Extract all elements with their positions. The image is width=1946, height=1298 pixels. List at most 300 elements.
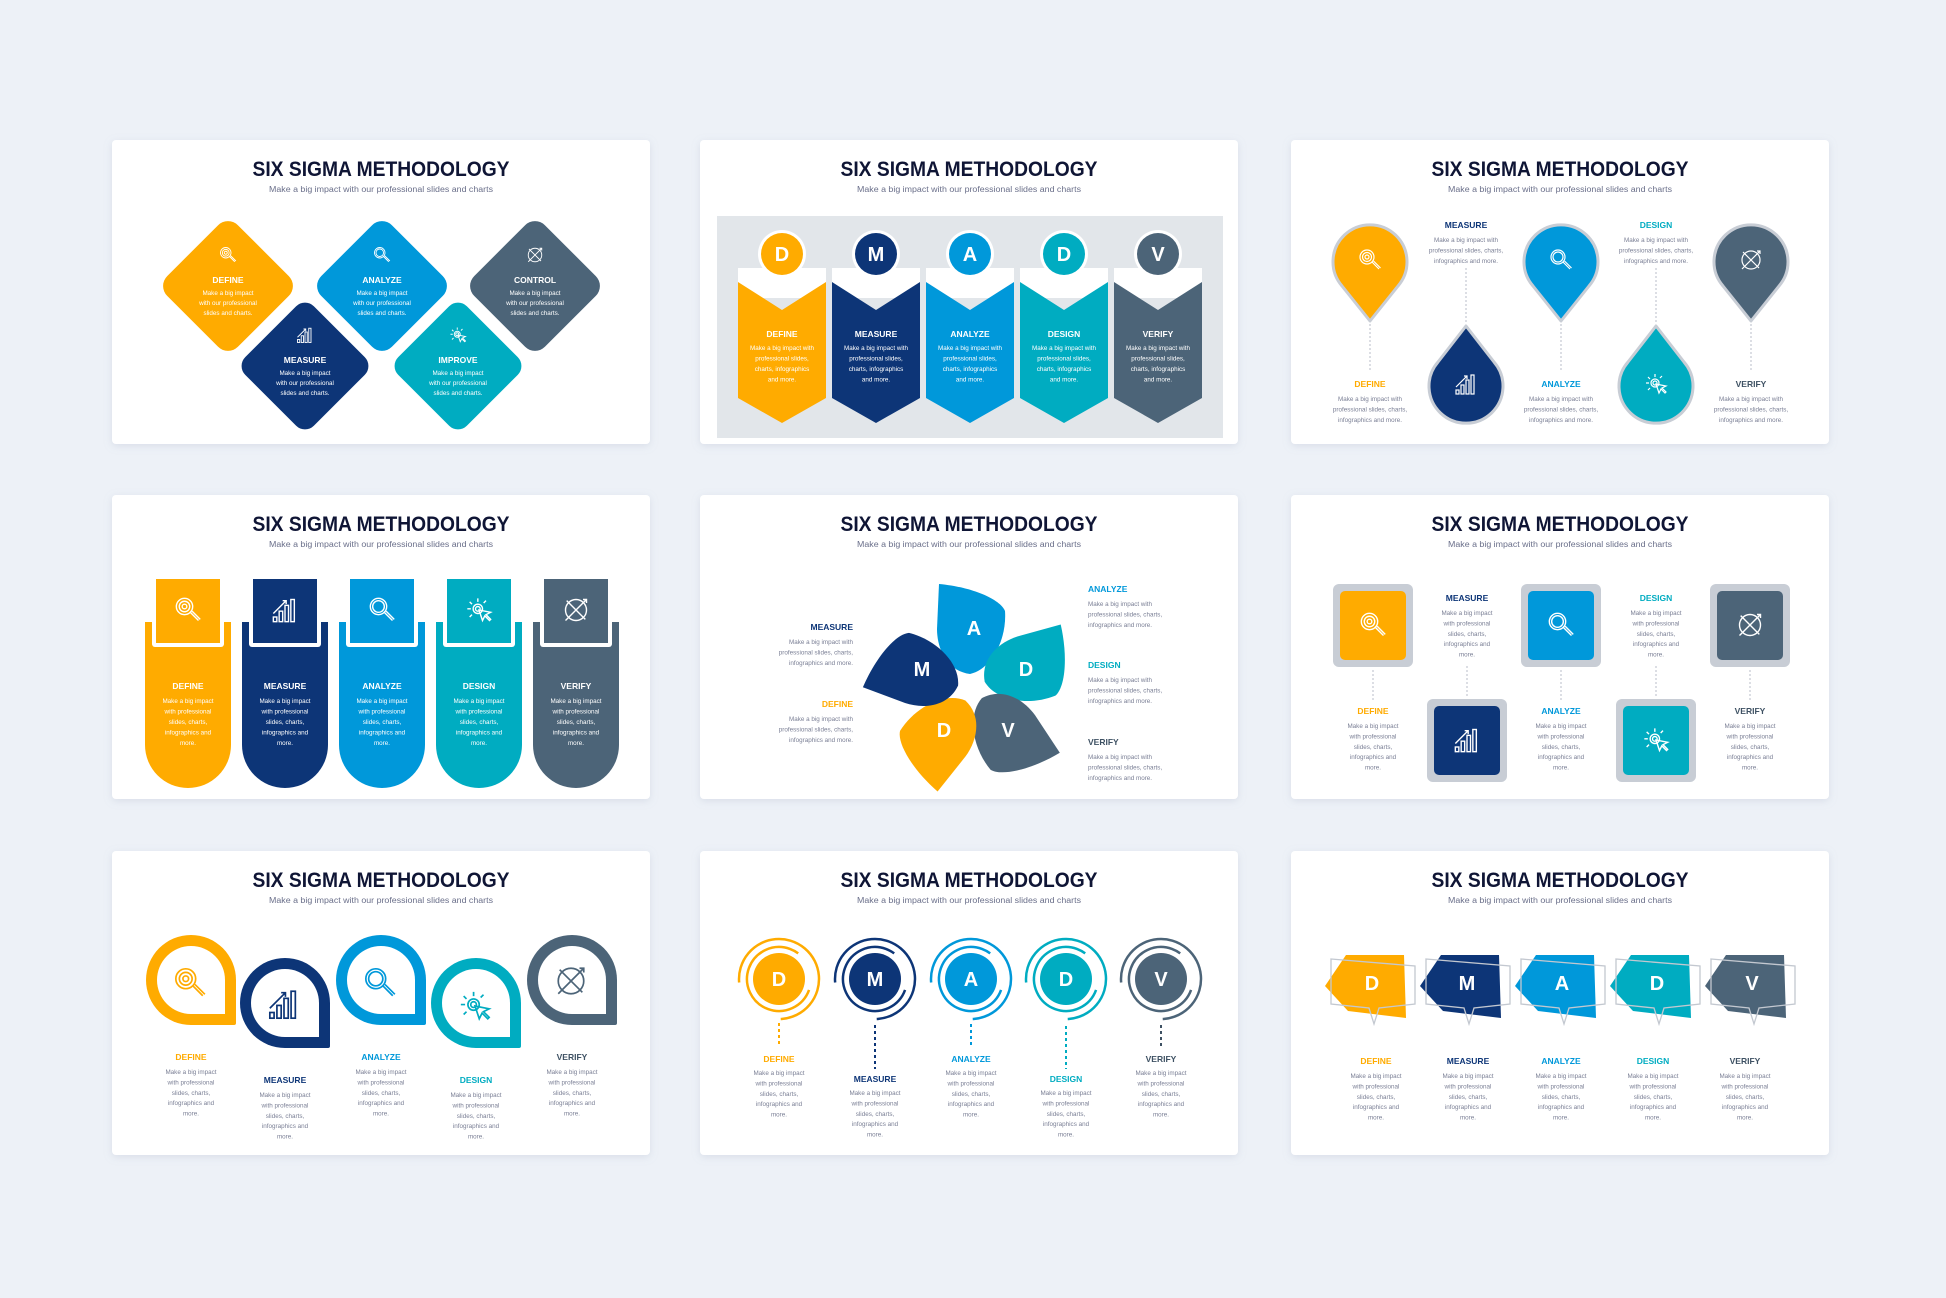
label: measure: infographics and more. (789, 660, 853, 667)
diamond: analyze: Make a big impact (356, 290, 408, 297)
tag: analyze: slides, charts, (1542, 1094, 1580, 1101)
flower chart: A (967, 618, 981, 640)
diamond: improve: Make a big impact (432, 370, 484, 377)
panel: chevron columns DMADV (700, 140, 1238, 444)
tab: measure: slides, charts, (266, 719, 304, 726)
pin: verify: VERIFY (1736, 379, 1767, 389)
circle: analyze: slides, charts, (952, 1091, 990, 1098)
diamond: define: with our professional (198, 300, 257, 307)
label: measure: professional slides, charts, (779, 649, 853, 656)
pin: verify: infographics and more. (1719, 417, 1783, 424)
tab: analyze: ANALYZE (362, 681, 402, 691)
pin: analyze (1524, 225, 1598, 424)
drop: verify: slides, charts, (553, 1090, 591, 1097)
tab: define: infographics and (165, 730, 212, 736)
circle: measure: MEASURE (854, 1074, 897, 1084)
title: SIX SIGMA METHODOLOGY (840, 869, 1098, 892)
title: Make a big impact with our professional slides and charts (857, 185, 1081, 194)
pin: analyze: infographics and more. (1529, 417, 1593, 424)
label: verify (1088, 737, 1162, 782)
tab: design: slides, charts, (460, 719, 498, 726)
tag: define: DEFINE (1360, 1056, 1392, 1066)
diamond: analyze: with our professional (352, 300, 411, 307)
circle: define (736, 936, 822, 1119)
drop: analyze: ANALYZE (361, 1052, 401, 1062)
gray backdrop (717, 216, 1223, 438)
circle: measure: infographics and (852, 1121, 899, 1128)
title (840, 158, 1098, 194)
diamond: analyze: slides and charts. (357, 310, 407, 317)
tab: verify (533, 575, 619, 788)
tab: verify: infographics and (553, 730, 600, 736)
circle: verify: Make a big impact (1135, 1070, 1187, 1077)
circle: define: DEFINE (763, 1054, 795, 1064)
tab: design (436, 575, 522, 788)
diamond: measure: MEASURE (284, 355, 327, 365)
title (1432, 158, 1688, 194)
title: Make a big impact with our professional slides and charts (269, 896, 493, 905)
label: analyze: Make a big impact with (1088, 601, 1153, 608)
tag: analyze: with professional (1537, 1083, 1584, 1090)
drop: analyze (336, 935, 426, 1118)
tab: verify: more. (568, 740, 584, 747)
tag: verify: more. (1737, 1115, 1753, 1122)
panel: tab columns (112, 495, 650, 799)
tag: measure: M (1459, 973, 1475, 995)
flower chart: M (914, 659, 930, 681)
tab: design: more. (471, 740, 487, 747)
square: measure (1427, 593, 1507, 782)
tag: verify: Make a big impact (1719, 1073, 1771, 1080)
diamond: improve: IMPROVE (438, 355, 478, 365)
drop: verify (527, 935, 617, 1118)
circle: define: infographics and (756, 1101, 803, 1108)
square: analyze: infographics and (1538, 754, 1585, 761)
square: analyze: slides, charts, (1542, 744, 1580, 751)
drop: define: infographics and (168, 1100, 215, 1107)
square: verify: VERIFY (1735, 706, 1766, 716)
square: define: DEFINE (1357, 706, 1389, 716)
square: measure: infographics and (1444, 641, 1491, 648)
tag: define (1325, 955, 1415, 1122)
pin: verify: Make a big impact with (1719, 396, 1784, 403)
pin: design: professional slides, charts, (1619, 247, 1693, 254)
column: verify: and more. (1144, 376, 1172, 384)
column: measure: M (868, 244, 884, 266)
diamond: define: DEFINE (212, 275, 244, 285)
circle: define: D (772, 969, 786, 991)
pin: define: professional slides, charts, (1333, 406, 1407, 413)
title: SIX SIGMA METHODOLOGY (252, 869, 510, 892)
tab: analyze: more. (374, 740, 390, 747)
pin: define (1333, 225, 1407, 424)
circle: design: slides, charts, (1047, 1111, 1085, 1118)
drop: verify: Make a big impact (546, 1069, 598, 1076)
pin: verify: professional slides, charts, (1714, 406, 1788, 413)
square: measure: MEASURE (1446, 593, 1489, 603)
tab: analyze: infographics and (359, 730, 406, 736)
drop: define: with professional (167, 1079, 214, 1086)
label: analyze: professional slides, charts, (1088, 611, 1162, 618)
tag: analyze: ANALYZE (1541, 1056, 1581, 1066)
pin: measure: MEASURE (1445, 220, 1488, 230)
pin: analyze: professional slides, charts, (1524, 406, 1598, 413)
tab: verify: Make a big impact (550, 698, 602, 705)
title: SIX SIGMA METHODOLOGY (1432, 869, 1688, 892)
square: design (1616, 593, 1696, 782)
diamond: control: Make a big impact (509, 290, 561, 297)
title: SIX SIGMA METHODOLOGY (840, 158, 1098, 181)
drop: define (146, 935, 236, 1118)
drop: measure: MEASURE (264, 1075, 307, 1085)
diamond: define: slides and charts. (203, 310, 253, 317)
label: define: DEFINE (822, 699, 853, 709)
tag: define: more. (1368, 1115, 1384, 1122)
diamond: measure: with our professional (275, 380, 334, 387)
square: verify: with professional (1726, 733, 1773, 740)
drop: measure: Make a big impact (259, 1092, 311, 1099)
label: define: professional slides, charts, (779, 726, 853, 733)
label: design: Make a big impact with (1088, 677, 1153, 684)
tag: analyze (1515, 955, 1605, 1122)
column: analyze: ANALYZE (950, 329, 990, 339)
column: verify: V (1151, 244, 1165, 266)
column: define: DEFINE (766, 329, 798, 339)
label: design: infographics and more. (1088, 698, 1152, 705)
title: Make a big impact with our professional slides and charts (1448, 896, 1672, 905)
diamond: improve (387, 295, 529, 437)
drop: measure: more. (277, 1134, 293, 1141)
square: design: infographics and (1633, 641, 1680, 648)
flower chart (862, 584, 1081, 793)
label: design (1088, 660, 1162, 705)
drop: define: slides, charts, (172, 1090, 210, 1097)
column: define: D (775, 244, 789, 266)
circle: analyze (928, 936, 1014, 1119)
circle: analyze: Make a big impact (945, 1070, 997, 1077)
square: design: with professional (1632, 620, 1679, 627)
diamond: control: CONTROL (514, 275, 556, 285)
circle: design: infographics and (1043, 1121, 1090, 1128)
square: measure: Make a big impact (1441, 610, 1493, 617)
column: analyze: A (963, 244, 977, 266)
tag: measure: more. (1460, 1115, 1476, 1122)
circle: design: Make a big impact (1040, 1090, 1092, 1097)
column: define: professional slides, (755, 356, 809, 362)
pin: measure: infographics and more. (1434, 258, 1498, 265)
diamond: measure: Make a big impact (279, 370, 331, 377)
square: verify: infographics and (1727, 754, 1774, 761)
title: SIX SIGMA METHODOLOGY (1432, 513, 1688, 536)
drop: design: Make a big impact (450, 1092, 502, 1099)
diamond: control: slides and charts. (510, 310, 560, 317)
circle: analyze: more. (963, 1112, 979, 1119)
pin: measure: Make a big impact with (1434, 237, 1499, 244)
tag: analyze: infographics and (1538, 1104, 1585, 1111)
square: measure: more. (1459, 652, 1475, 659)
tab: define: DEFINE (172, 681, 204, 691)
drop: design: DESIGN (460, 1075, 492, 1085)
label: measure: Make a big impact with (789, 639, 853, 646)
tab: measure: more. (277, 740, 293, 747)
tab: analyze: with professional (358, 708, 405, 716)
circle: define: slides, charts, (760, 1091, 798, 1098)
tag: measure: infographics and (1445, 1104, 1492, 1111)
diamond: control (464, 215, 606, 357)
circle: define: with professional (755, 1080, 802, 1087)
circle: measure: M (867, 969, 883, 991)
square: define (1333, 584, 1413, 772)
diamond: measure (234, 295, 376, 437)
pin: design: infographics and more. (1624, 258, 1688, 265)
tab: analyze: Make a big impact (356, 698, 408, 705)
column: design: and more. (1050, 376, 1078, 384)
column: design: professional slides, (1037, 356, 1091, 362)
column: measure: professional slides, (849, 356, 903, 362)
label: verify: VERIFY (1088, 737, 1119, 747)
tag: verify: with professional (1721, 1083, 1768, 1090)
circle: verify: V (1154, 969, 1168, 991)
column: design: D (1057, 244, 1071, 266)
circle: analyze: A (964, 969, 978, 991)
tab: define: Make a big impact (162, 698, 214, 705)
column: verify (1114, 230, 1202, 423)
circle: analyze: ANALYZE (951, 1054, 991, 1064)
drop: verify: infographics and (549, 1100, 596, 1107)
drop: define: DEFINE (175, 1052, 207, 1062)
pin: define: infographics and more. (1338, 417, 1402, 424)
label: analyze: infographics and more. (1088, 622, 1152, 629)
column: analyze (926, 230, 1014, 423)
panel: ring drops (112, 851, 650, 1155)
label: verify: infographics and more. (1088, 775, 1152, 782)
drop: design (431, 958, 521, 1141)
diamond: improve: with our professional (428, 380, 487, 387)
diamond: define: Make a big impact (202, 290, 254, 297)
tag: verify: V (1745, 973, 1759, 995)
column: measure: Make a big impact with (844, 345, 909, 352)
circle: measure: with professional (851, 1100, 898, 1107)
flower chart: D (937, 720, 951, 742)
column: analyze: and more. (956, 376, 984, 384)
column: verify: charts, infographics (1131, 366, 1185, 373)
label: verify: professional slides, charts, (1088, 764, 1162, 771)
square: verify: more. (1742, 765, 1758, 772)
square: define: with professional (1349, 733, 1396, 740)
tag: measure: Make a big impact (1442, 1073, 1494, 1080)
label: define (779, 699, 853, 744)
drop: define: more. (183, 1111, 199, 1118)
drop: define: Make a big impact (165, 1069, 217, 1076)
tab: define (145, 575, 231, 788)
column: define (738, 230, 826, 423)
square: define: infographics and (1350, 754, 1397, 761)
column: define: Make a big impact with (750, 345, 815, 352)
circle: define: Make a big impact (753, 1070, 805, 1077)
tag: define: with professional (1352, 1083, 1399, 1090)
square: verify: slides, charts, (1731, 744, 1769, 751)
column: define: and more. (768, 376, 796, 384)
circle: design: D (1059, 969, 1073, 991)
circle: analyze: with professional (947, 1080, 994, 1087)
panel: tag shapes (1291, 851, 1829, 1155)
tab: design: with professional (455, 708, 502, 716)
drop: analyze: more. (373, 1111, 389, 1118)
pin: design (1619, 220, 1693, 423)
square: verify: Make a big impact (1724, 723, 1776, 730)
pin: analyze: ANALYZE (1541, 379, 1581, 389)
tag: measure (1420, 955, 1510, 1122)
pin: design: DESIGN (1640, 220, 1672, 230)
label: measure (779, 622, 853, 667)
tag: design (1610, 955, 1700, 1122)
tag: design: D (1650, 973, 1664, 995)
square: analyze: ANALYZE (1541, 706, 1581, 716)
title (1432, 513, 1688, 549)
drop: verify: with professional (548, 1079, 595, 1086)
circle: analyze: infographics and (948, 1101, 995, 1108)
square: analyze: more. (1553, 765, 1569, 772)
drop: analyze: Make a big impact (355, 1069, 407, 1076)
tag: analyze: more. (1553, 1115, 1569, 1122)
tag: verify: infographics and (1722, 1104, 1769, 1111)
title (252, 513, 510, 549)
drop: analyze: with professional (357, 1079, 404, 1086)
circle: verify: slides, charts, (1142, 1091, 1180, 1098)
label: measure: MEASURE (810, 622, 853, 632)
pin: measure: professional slides, charts, (1429, 247, 1503, 254)
circle: measure: more. (867, 1132, 883, 1139)
title (1432, 869, 1688, 905)
title (840, 513, 1098, 549)
pin: define: DEFINE (1354, 379, 1386, 389)
circle: verify: more. (1153, 1112, 1169, 1119)
pin: define: Make a big impact with (1338, 396, 1403, 403)
drop: measure (240, 958, 330, 1141)
tag: verify: VERIFY (1730, 1056, 1761, 1066)
circle: design: DESIGN (1050, 1074, 1082, 1084)
tab: verify: slides, charts, (557, 719, 595, 726)
column: measure: charts, infographics (849, 366, 903, 373)
pin: verify (1714, 225, 1788, 424)
label: define: infographics and more. (789, 737, 853, 744)
square: analyze: with professional (1537, 733, 1584, 740)
tag: measure: with professional (1444, 1083, 1491, 1090)
panel: diamonds DMAIC (112, 140, 650, 444)
tab: measure (242, 575, 328, 788)
diamond: control: with our professional (505, 300, 564, 307)
tag: analyze: Make a big impact (1535, 1073, 1587, 1080)
tag: verify: slides, charts, (1726, 1094, 1764, 1101)
column: verify: Make a big impact with (1126, 345, 1191, 352)
tag: define: Make a big impact (1350, 1073, 1402, 1080)
title: SIX SIGMA METHODOLOGY (252, 158, 510, 181)
circle: design: more. (1058, 1132, 1074, 1139)
drop: measure: infographics and (262, 1123, 309, 1130)
circle: measure: Make a big impact (849, 1090, 901, 1097)
tag: design: DESIGN (1637, 1056, 1669, 1066)
pin: analyze: Make a big impact with (1529, 396, 1594, 403)
tag: define: slides, charts, (1357, 1094, 1395, 1101)
square: design: Make a big impact (1630, 610, 1682, 617)
title (840, 869, 1098, 905)
diamond: define (157, 215, 299, 357)
diamond: measure: slides and charts. (280, 390, 330, 397)
circle: verify: infographics and (1138, 1101, 1185, 1108)
label: analyze: ANALYZE (1088, 584, 1128, 594)
tag: design: with professional (1629, 1083, 1676, 1090)
tag: design: more. (1645, 1115, 1661, 1122)
circle: design: with professional (1042, 1100, 1089, 1107)
label: analyze (1088, 584, 1162, 629)
title: SIX SIGMA METHODOLOGY (252, 513, 510, 536)
tab: verify: with professional (552, 708, 599, 716)
tab: measure: with professional (261, 708, 308, 716)
circle: measure: slides, charts, (856, 1111, 894, 1118)
tab: define: more. (180, 740, 196, 747)
label: design: DESIGN (1088, 660, 1121, 670)
label: define: Make a big impact with (789, 716, 853, 723)
square: analyze (1521, 584, 1601, 772)
flower chart: D (1019, 659, 1033, 681)
drop: analyze: slides, charts, (362, 1090, 400, 1097)
square: design: DESIGN (1640, 593, 1672, 603)
column: analyze: Make a big impact with (938, 345, 1003, 352)
panel: map pins (1291, 140, 1829, 444)
tab: measure: Make a big impact (259, 698, 311, 705)
tag: measure: MEASURE (1447, 1056, 1490, 1066)
diamond: analyze: ANALYZE (362, 275, 402, 285)
tab: design: DESIGN (463, 681, 495, 691)
panel: petal flower (700, 495, 1238, 799)
tab: define: slides, charts, (169, 719, 207, 726)
column: measure: MEASURE (855, 329, 898, 339)
pin: measure (1429, 220, 1503, 423)
circle: verify (1118, 936, 1204, 1119)
title: SIX SIGMA METHODOLOGY (1432, 158, 1688, 181)
drop: design: with professional (452, 1102, 499, 1109)
circle: define: more. (771, 1112, 787, 1119)
square: design: slides, charts, (1637, 631, 1675, 638)
title (252, 869, 510, 905)
tab: define: with professional (164, 708, 211, 716)
drop: design: more. (468, 1134, 484, 1141)
column: design: Make a big impact with (1032, 345, 1097, 352)
title (252, 158, 510, 194)
square: define: slides, charts, (1354, 744, 1392, 751)
tag: analyze: A (1555, 973, 1569, 995)
title: Make a big impact with our professional slides and charts (857, 896, 1081, 905)
column: measure (832, 230, 920, 423)
pin: design: Make a big impact with (1624, 237, 1689, 244)
square: define: more. (1365, 765, 1381, 772)
drop: verify: more. (564, 1111, 580, 1118)
square: verify (1710, 584, 1790, 772)
circle: design (1023, 936, 1109, 1139)
title: Make a big impact with our professional slides and charts (857, 540, 1081, 549)
tab: design: Make a big impact (453, 698, 505, 705)
circle: verify: VERIFY (1146, 1054, 1177, 1064)
title: Make a big impact with our professional slides and charts (1448, 540, 1672, 549)
title: SIX SIGMA METHODOLOGY (840, 513, 1098, 536)
tag: design: Make a big impact (1627, 1073, 1679, 1080)
column: measure: and more. (862, 376, 890, 384)
circle: measure (832, 936, 918, 1139)
drop: verify: VERIFY (557, 1052, 588, 1062)
tag: measure: slides, charts, (1449, 1094, 1487, 1101)
column: verify: VERIFY (1143, 329, 1174, 339)
drop: design: infographics and (453, 1123, 500, 1130)
